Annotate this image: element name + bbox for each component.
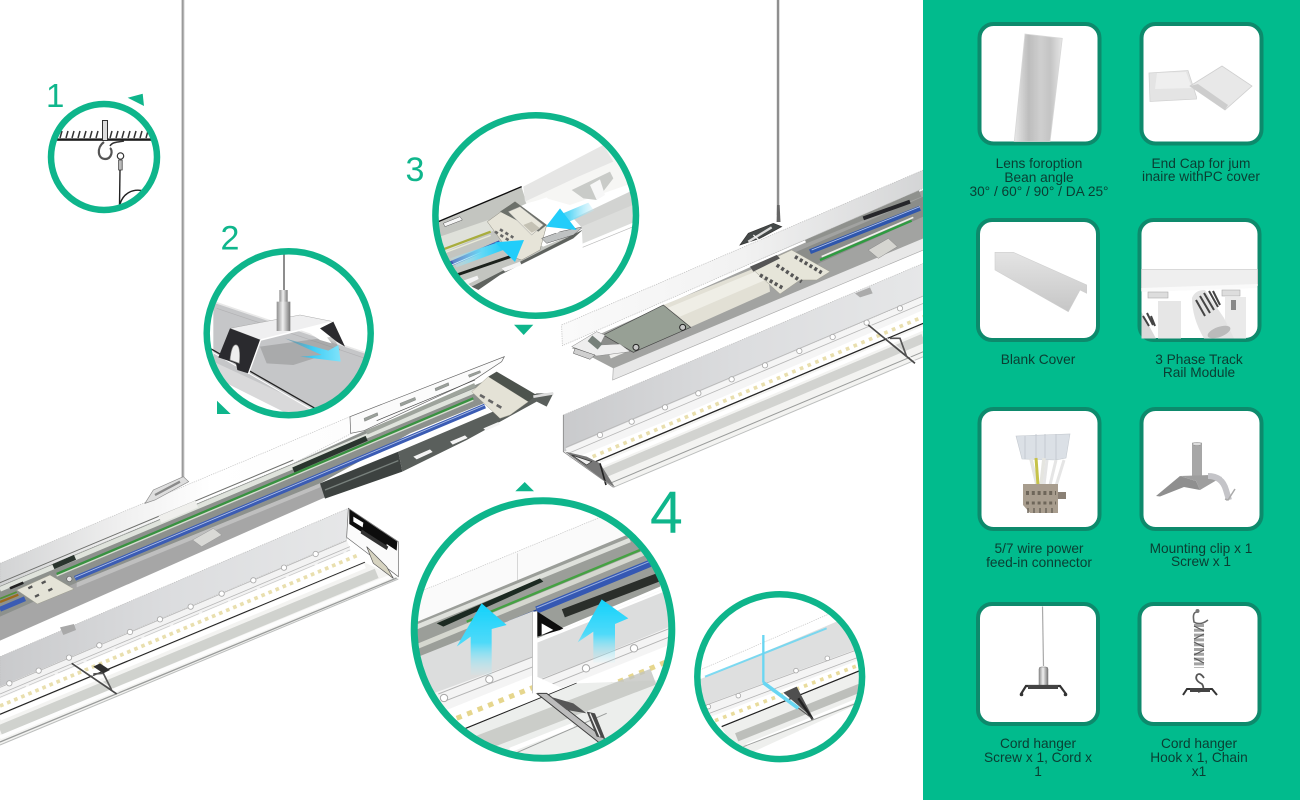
clip (537, 693, 608, 743)
number 3: 3 (406, 151, 424, 189)
caption: beam angle: Bean angle (1004, 170, 1074, 185)
caption: mounting clip second line: Screw x 1 (1171, 554, 1231, 569)
caption: Cord hanger (1000, 736, 1076, 751)
accessories panel (923, 0, 1300, 800)
ceiling hook illustration (55, 120, 155, 206)
caption: 3 Phase Track (1155, 352, 1243, 367)
lens clip (868, 325, 915, 363)
caption: cord hanger details: 1 (1034, 764, 1042, 779)
lens clip (72, 663, 118, 694)
icon: end caps (1149, 66, 1252, 110)
caption: End Cap for jum (1152, 156, 1250, 171)
card: lens (980, 24, 1100, 171)
card: cord hanger (978, 604, 1098, 751)
front end (532, 612, 538, 694)
end cap (347, 508, 398, 578)
card: track module (1140, 220, 1260, 367)
caption: Cord hanger (1161, 736, 1237, 751)
caption: Blank Cover (1001, 352, 1076, 367)
tray end (398, 393, 553, 472)
caption: Mounting clip x 1 (1150, 541, 1252, 556)
caption: chain hanger details: Hook x 1, Chain (1150, 750, 1248, 765)
pointer triangle (515, 482, 534, 491)
caption: chain hanger details: x1 (1192, 764, 1206, 779)
blue arrows (457, 603, 507, 675)
card: power connector (980, 409, 1100, 556)
card: mounting clip (1142, 409, 1262, 556)
hanging cable left (182, 0, 185, 478)
number 2: 2 (220, 220, 239, 258)
connector blocks (750, 250, 830, 294)
lens insertion illustration (413, 517, 677, 760)
hanger bracket right (740, 223, 782, 245)
number 4: 4 (650, 480, 683, 546)
step 1 callout: ceiling anchor (46, 77, 157, 210)
upper-left channel with wires (0, 357, 553, 641)
pointer triangle (514, 325, 533, 335)
right upper channel fixture (562, 170, 923, 380)
step 2 callout: mounting bracket (207, 220, 371, 420)
number 1: 1 (46, 77, 64, 114)
caption: chain hanger details (1150, 750, 1248, 779)
caption: end cap second line: inaire withPC cover (1142, 169, 1260, 184)
tab (60, 624, 76, 635)
icon: blank cover (995, 252, 1087, 312)
caption: power connector second line: feed-in connector (986, 555, 1092, 570)
tab (855, 287, 873, 297)
step 4 callout: lens insertion (413, 480, 683, 760)
card: end cap (1142, 24, 1262, 171)
assembled illustration (698, 611, 867, 753)
caption: 5/7 wire power (994, 541, 1084, 556)
icon: lens strip (1014, 34, 1062, 142)
icon: mounting clip (1156, 442, 1235, 500)
right lower LED lens fixture (563, 263, 923, 487)
icon: cord hanger (1020, 606, 1067, 696)
fixture left end (565, 452, 615, 487)
caption: beam angle: 30° / 60° / 90° / DA 25° (969, 184, 1109, 199)
connector illustration (433, 145, 637, 290)
caption: cord hanger details (984, 750, 1092, 779)
pointer triangle (217, 401, 231, 414)
icon: wire connector (1016, 434, 1070, 513)
pointer triangle (128, 94, 144, 106)
caption: cord hanger details: Screw x 1, Cord x (984, 750, 1092, 765)
caption: beam angle (969, 170, 1109, 199)
caption: Lens foroption (996, 156, 1082, 171)
bracket illustration (207, 253, 367, 420)
icon: chain hanger (1183, 609, 1217, 695)
icon: track rail with spots (1142, 270, 1258, 341)
lower-left LED lens fixture (0, 508, 398, 745)
hanger bracket left (145, 477, 189, 503)
detail callout: assembled lens (697, 594, 867, 759)
card: blank cover (978, 220, 1098, 367)
step 3 callout: connector coupling (406, 115, 637, 335)
caption: track module second line: Rail Module (1163, 365, 1235, 380)
vent (193, 528, 222, 547)
hanging cable right (777, 0, 780, 222)
card: chain hanger (1140, 604, 1260, 751)
connector block (17, 575, 74, 604)
blue guide lines (705, 628, 827, 677)
